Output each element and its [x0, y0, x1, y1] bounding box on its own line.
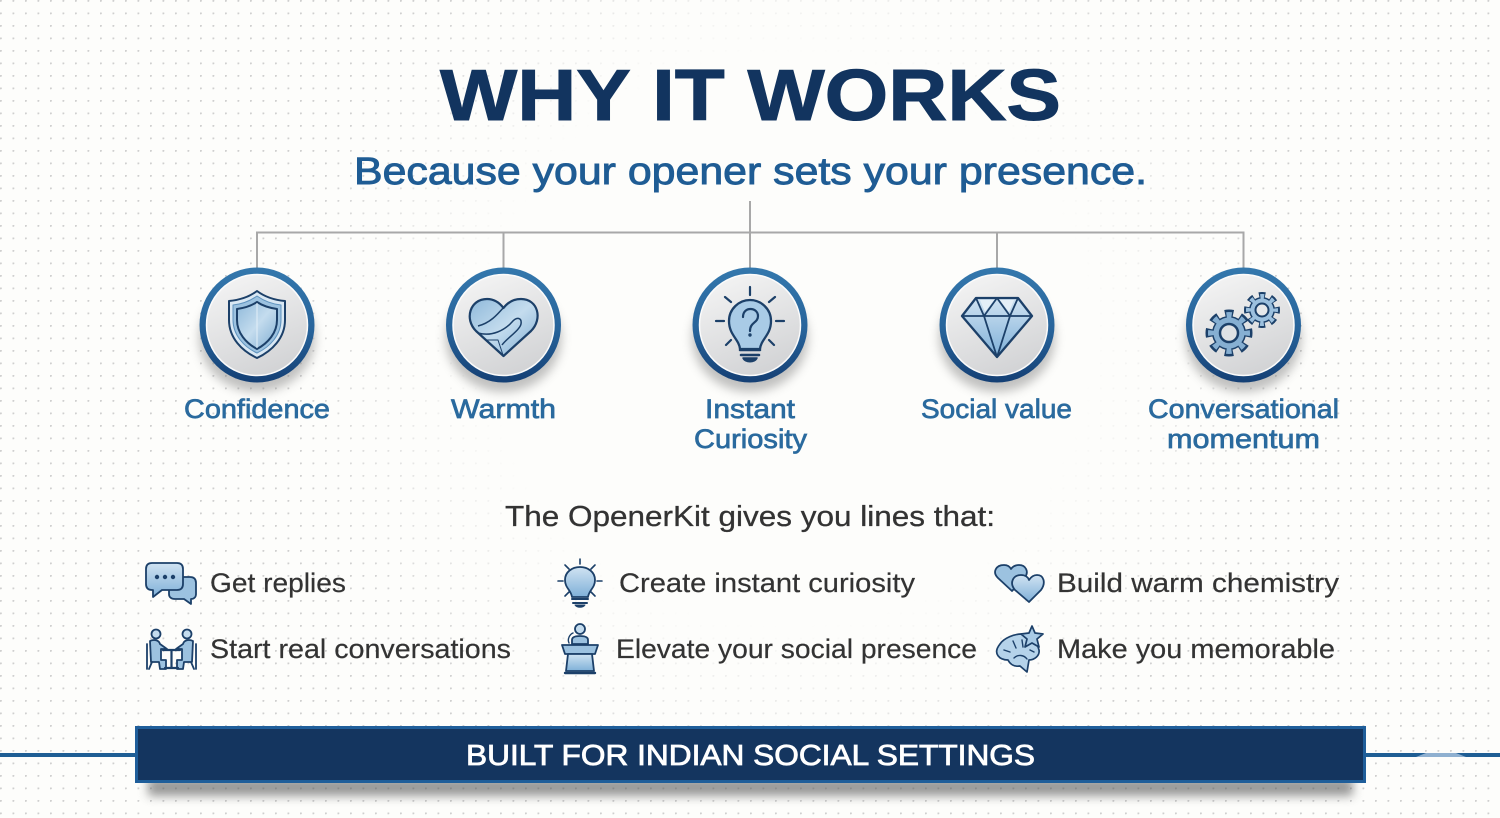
title: WHY IT WORKS [440, 56, 1061, 136]
label: Conversational momentum [1148, 394, 1339, 454]
label: Warmth: Warmth [451, 394, 556, 424]
item: Conversational momentum [1148, 268, 1339, 454]
lead-in text: The OpenerKit gives you lines that: [505, 501, 995, 533]
item: Instant Curiosity [692, 268, 808, 454]
benefit: Make you memorable [997, 626, 1335, 672]
item: Social value [921, 268, 1072, 424]
icon: diamond [962, 298, 1032, 357]
icon: podium speaker [562, 624, 598, 673]
label: Build warm chemistry: Build warm chemistry [1057, 568, 1340, 598]
subtitle: Because your opener sets your presence. [354, 151, 1147, 193]
benefit: Elevate your social presence [562, 624, 977, 673]
item: Warmth [446, 268, 562, 424]
icon: two people at a table [147, 630, 196, 669]
label: Instant Curiosity: Curiosity [694, 424, 808, 454]
label: Create instant curiosity: Create instant curiosity [619, 568, 916, 598]
icon: gears [1210, 296, 1276, 352]
label: Get replies: Get replies [210, 568, 346, 598]
benefit: Get replies [146, 563, 346, 604]
icon: heart [470, 299, 538, 356]
label: Confidence: Confidence [184, 394, 330, 424]
icon: light bulb [558, 559, 602, 607]
benefit: Create instant curiosity [558, 559, 916, 607]
label: Elevate your social presence: Elevate your social presence [616, 634, 977, 664]
banner text: BUILT FOR INDIAN SOCIAL SETTINGS [466, 740, 1035, 772]
label: Social value: Social value [921, 394, 1072, 424]
banner side rules [0, 753, 1500, 757]
label: Start real conversations: Start real conversations [210, 634, 511, 664]
label: Make you memorable: Make you memorable [1057, 634, 1335, 664]
icon: chat bubbles [146, 563, 196, 604]
label: Instant Curiosity: Instant [705, 394, 796, 424]
label: Conversational momentum: Conversational [1148, 394, 1339, 424]
benefit: Start real conversations [147, 630, 511, 669]
icon: brain with star [997, 626, 1043, 672]
label: Instant Curiosity [694, 394, 808, 454]
banner [136, 728, 1364, 796]
icon: light bulb with question mark [716, 287, 784, 362]
icon: two hearts [995, 565, 1044, 602]
connector tree [257, 201, 1244, 268]
benefit: Build warm chemistry [995, 565, 1340, 602]
label: Conversational momentum: momentum [1167, 424, 1320, 454]
item: Confidence [184, 268, 330, 424]
icon: shield [229, 291, 285, 358]
